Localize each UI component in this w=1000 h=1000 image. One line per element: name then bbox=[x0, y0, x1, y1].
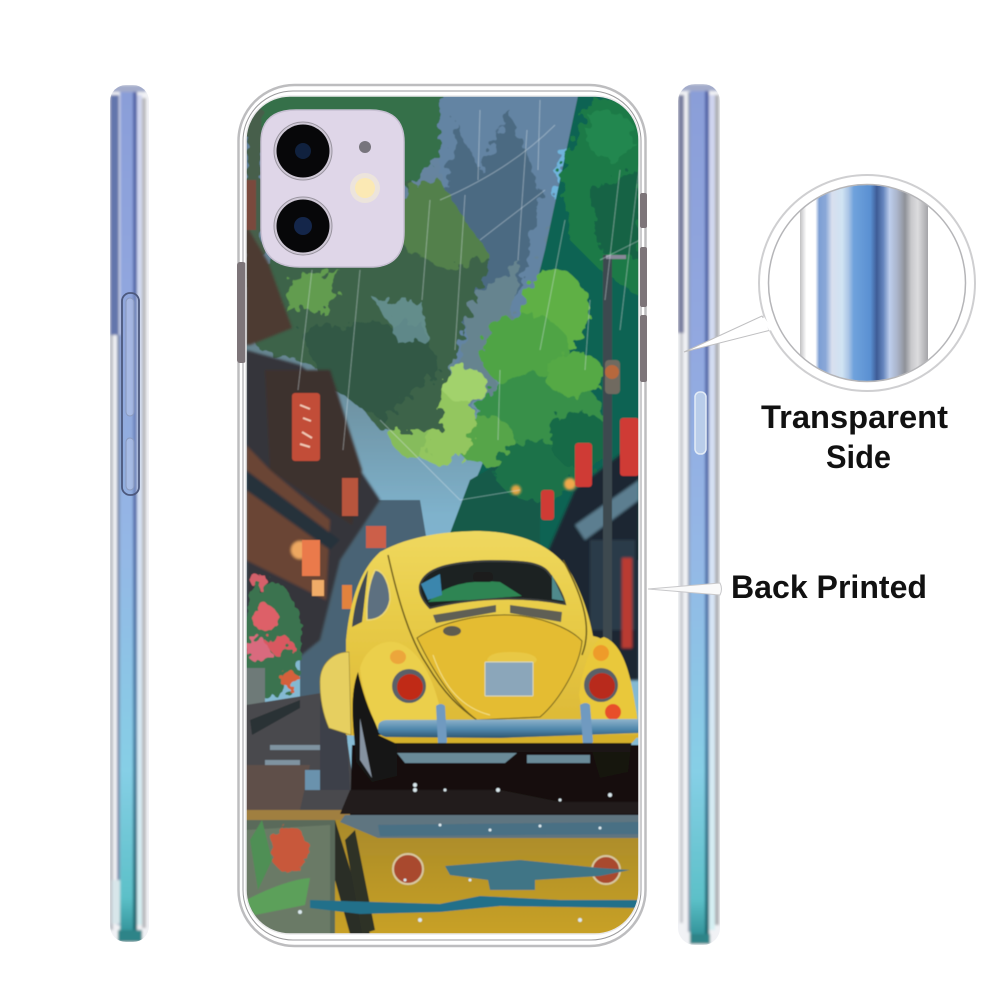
bright green tree clumps bbox=[390, 270, 610, 500]
artwork inner rim bbox=[246, 96, 639, 934]
plate light bbox=[487, 652, 537, 663]
right side view of case bbox=[676, 82, 722, 948]
bumper guards bbox=[436, 704, 447, 747]
rear fender left bbox=[360, 642, 443, 730]
right wheel bbox=[592, 742, 632, 778]
printed artwork: rainy street with yellow beetle bbox=[242, 90, 645, 934]
case buttons bbox=[237, 193, 647, 382]
side windows bbox=[367, 570, 390, 620]
rear window bbox=[420, 561, 565, 608]
under car dark band bbox=[397, 743, 630, 752]
yellow beetle car bbox=[320, 531, 640, 782]
taillights bbox=[392, 669, 426, 703]
reflected plate bbox=[445, 860, 630, 890]
camera module plate bbox=[261, 110, 404, 267]
product infographic canvas bbox=[110, 84, 976, 948]
reflected streak bbox=[310, 896, 639, 914]
label: Transparent Side: Side bbox=[826, 439, 891, 475]
flash bbox=[350, 173, 380, 203]
magnified stripes bbox=[769, 185, 965, 381]
label: Transparent Side bbox=[761, 399, 948, 475]
under car glimpse bbox=[397, 753, 590, 763]
car body bbox=[346, 531, 640, 738]
left building upper roof bbox=[246, 225, 292, 345]
valance bbox=[378, 735, 639, 743]
sky background bbox=[246, 136, 638, 770]
right side street buildings bbox=[511, 440, 639, 680]
engine lid bbox=[417, 615, 582, 720]
left side view of case bbox=[110, 85, 149, 942]
left side volume buttons bbox=[122, 293, 139, 495]
engine vents bbox=[433, 605, 562, 623]
microphone bbox=[359, 141, 371, 153]
stone planter box bbox=[246, 668, 266, 706]
right side power button bbox=[695, 392, 706, 454]
badge bbox=[443, 626, 461, 636]
wheel rim bbox=[360, 718, 372, 778]
puddle reflection of car bbox=[246, 820, 639, 934]
body seam lines bbox=[388, 555, 477, 720]
turn signals bbox=[390, 650, 406, 664]
case outer frame bbox=[238, 85, 646, 946]
left building lower bbox=[246, 350, 380, 700]
utility pole bbox=[603, 255, 626, 645]
left wheel and arch bbox=[353, 672, 397, 782]
center phone case back view bbox=[237, 85, 647, 946]
wet road and shadow under car bbox=[298, 745, 639, 922]
front fender bbox=[320, 652, 351, 735]
magnifier callout: transparent side bbox=[684, 175, 975, 391]
street lanterns, right side bbox=[541, 418, 639, 520]
upper lens bbox=[274, 122, 332, 180]
lower lens bbox=[274, 197, 332, 255]
bumper bbox=[378, 719, 639, 738]
rear fender right bbox=[580, 636, 637, 719]
centre street behind car bbox=[299, 500, 426, 697]
magnifier ring bbox=[759, 175, 975, 391]
label: Transparent Side: Transparent bbox=[761, 399, 948, 435]
callout pointer bbox=[684, 316, 771, 352]
right dark green hillside bbox=[477, 96, 638, 560]
distant forest bbox=[444, 100, 578, 412]
license plate bbox=[485, 662, 533, 696]
road bbox=[246, 693, 352, 821]
right upper foliage bbox=[560, 100, 645, 300]
callout pointer: back printed bbox=[648, 583, 722, 595]
reflected taillights bbox=[393, 854, 423, 884]
street lanterns, left side bbox=[292, 393, 386, 609]
left and centre tree canopy bbox=[246, 90, 490, 430]
flower planter bbox=[242, 572, 302, 698]
camera cutout bbox=[261, 110, 404, 267]
overhead wires and rain streaks bbox=[298, 100, 640, 500]
label: Back Printed: Back Printed bbox=[731, 569, 927, 605]
